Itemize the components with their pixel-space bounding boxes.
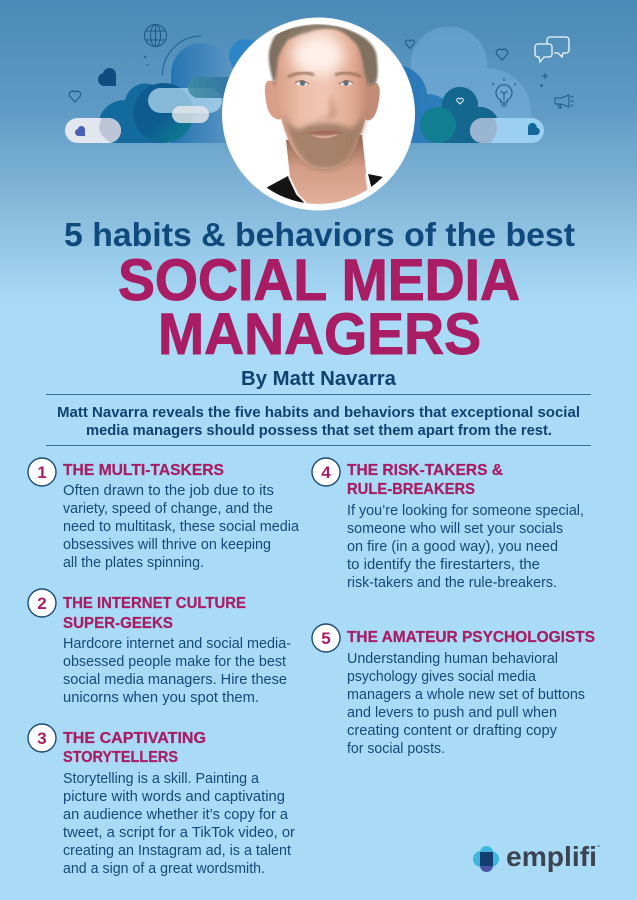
- body 1: variety, speed of change, and the: [63, 501, 273, 517]
- body 1: all the plates spinning.: [63, 555, 204, 571]
- number badge 5: [312, 624, 340, 652]
- number badge 5: 5: [321, 629, 331, 648]
- body 1: [63, 483, 300, 571]
- body 1: need to multitask, these social media: [63, 519, 300, 535]
- intro text: Matt Navarra reveals the five habits and behaviors that exceptional social: [57, 405, 580, 421]
- number badge 3: [28, 724, 56, 752]
- body 2: social media managers. Hire these: [63, 672, 287, 688]
- icon: outline heart right: [496, 49, 508, 60]
- body 2: [63, 636, 291, 706]
- body 2: obsessed people make for the best: [63, 654, 286, 670]
- icon: megaphone: [555, 95, 574, 108]
- heading 4: RULE-BREAKERS: [347, 481, 475, 498]
- number badge 1: 1: [37, 463, 47, 482]
- hair: [269, 24, 378, 86]
- intro text: [57, 405, 580, 439]
- nose: [319, 96, 338, 122]
- heading line: 5 habits: 5 habits & behaviors of the best: [64, 216, 575, 253]
- body 3: an audience whether it’s copy for a: [63, 807, 289, 823]
- portrait white ring: [222, 18, 415, 210]
- logo cross mark: [473, 846, 499, 872]
- body 3: [63, 771, 295, 877]
- number badge 4: 4: [321, 463, 331, 482]
- heading 4: [347, 462, 503, 498]
- head: [276, 27, 368, 169]
- body 1: Often drawn to the job due to its: [63, 483, 274, 499]
- heading 2: SUPER-GEEKS: [63, 615, 173, 632]
- shirt: [266, 174, 383, 203]
- body 5: Understanding human behavioral: [347, 651, 558, 667]
- number badge 1: [28, 458, 56, 486]
- portrait: [222, 18, 415, 210]
- icon: chat bubbles: [535, 37, 569, 62]
- beard: [283, 110, 367, 170]
- number badge 2: 2: [37, 594, 47, 613]
- number badge 2: [28, 589, 56, 617]
- body 3: picture with words and captivating: [63, 789, 285, 805]
- number badge 4: [312, 458, 340, 486]
- logo: emplifi: [473, 841, 600, 872]
- panel: habit 1: [28, 458, 300, 571]
- body 5: managers a whole new set of buttons: [347, 687, 585, 703]
- byline: By Matt Navarra: [241, 368, 397, 390]
- mouth: [307, 130, 343, 138]
- small dots: [144, 56, 148, 66]
- ears: [265, 81, 281, 119]
- eye brows: [288, 73, 361, 77]
- body 3: Storytelling is a skill. Painting a: [63, 771, 260, 787]
- body 5: [347, 651, 585, 757]
- body 1: obsessives will thrive on keeping: [63, 537, 271, 553]
- logo wordmark: emplifi: [506, 841, 597, 872]
- body 4: on fire (in a good way), you need: [347, 539, 558, 555]
- neck: [286, 135, 368, 206]
- icon: heart in right pill: [528, 123, 540, 135]
- icon: small blue heart in pill: [75, 126, 85, 136]
- panel: habit 4: [312, 458, 584, 591]
- icon: outline heart: [69, 91, 81, 102]
- body 4: someone who will set your socials: [347, 521, 563, 537]
- body 2: Hardcore internet and social media-: [63, 636, 291, 652]
- body 3: tweet, a script for a TikTok video, or: [63, 825, 295, 841]
- eyes: [295, 80, 353, 86]
- icon: dark heart: [98, 68, 116, 86]
- body 3: and a sign of a great wordsmith.: [63, 861, 265, 877]
- body 5: psychology gives social media: [347, 669, 537, 685]
- body 4: risk-takers and the rule-breakers.: [347, 575, 557, 591]
- panel: habit 3: [28, 724, 295, 877]
- illustration: right cloud group: [395, 26, 574, 143]
- heading 3: [63, 730, 206, 766]
- heading 2: THE INTERNET CULTURE: [63, 595, 246, 612]
- forehead highlight: [292, 35, 344, 75]
- decorative arc: [162, 36, 201, 75]
- body 4: If you’re looking for someone special,: [347, 503, 584, 519]
- body 4: to identify the firestarters, the: [347, 557, 540, 573]
- icon: globe: [144, 24, 166, 46]
- title: social media: SOCIAL MEDIA: [118, 248, 520, 313]
- body 3: creating an Instagram ad, is a talent: [63, 843, 291, 859]
- panel: habit 5: [312, 624, 595, 757]
- icon: small white heart: [457, 98, 463, 104]
- title: managers: MANAGERS: [158, 302, 481, 367]
- intro text: media managers should possess that set them apart from the rest.: [86, 423, 552, 439]
- heading 3: THE CAPTIVATING: [63, 730, 206, 747]
- body 5: for social posts.: [347, 741, 445, 757]
- number badge 3: 3: [37, 729, 47, 748]
- heading 5: THE AMATEUR PSYCHOLOGISTS: [347, 629, 595, 646]
- body 2: unicorns when you spot them.: [63, 690, 259, 706]
- body 5: creating content or drafting copy: [347, 723, 558, 739]
- icon: outline heart top: [406, 40, 414, 48]
- icon: plus and dot: [541, 73, 548, 86]
- illustration: left cloud group: [65, 24, 263, 143]
- body 4: [347, 503, 584, 591]
- icon: light bulb: [492, 78, 516, 106]
- heading 3: STORYTELLERS: [63, 749, 178, 766]
- trademark: ™: [596, 844, 600, 849]
- body 5: and levers to push and pull when: [347, 705, 557, 721]
- panel: habit 2: [28, 589, 291, 706]
- heading 2: [63, 595, 246, 632]
- heading 4: THE RISK-TAKERS &: [347, 462, 503, 479]
- heading 1: THE MULTI-TASKERS: [63, 462, 224, 479]
